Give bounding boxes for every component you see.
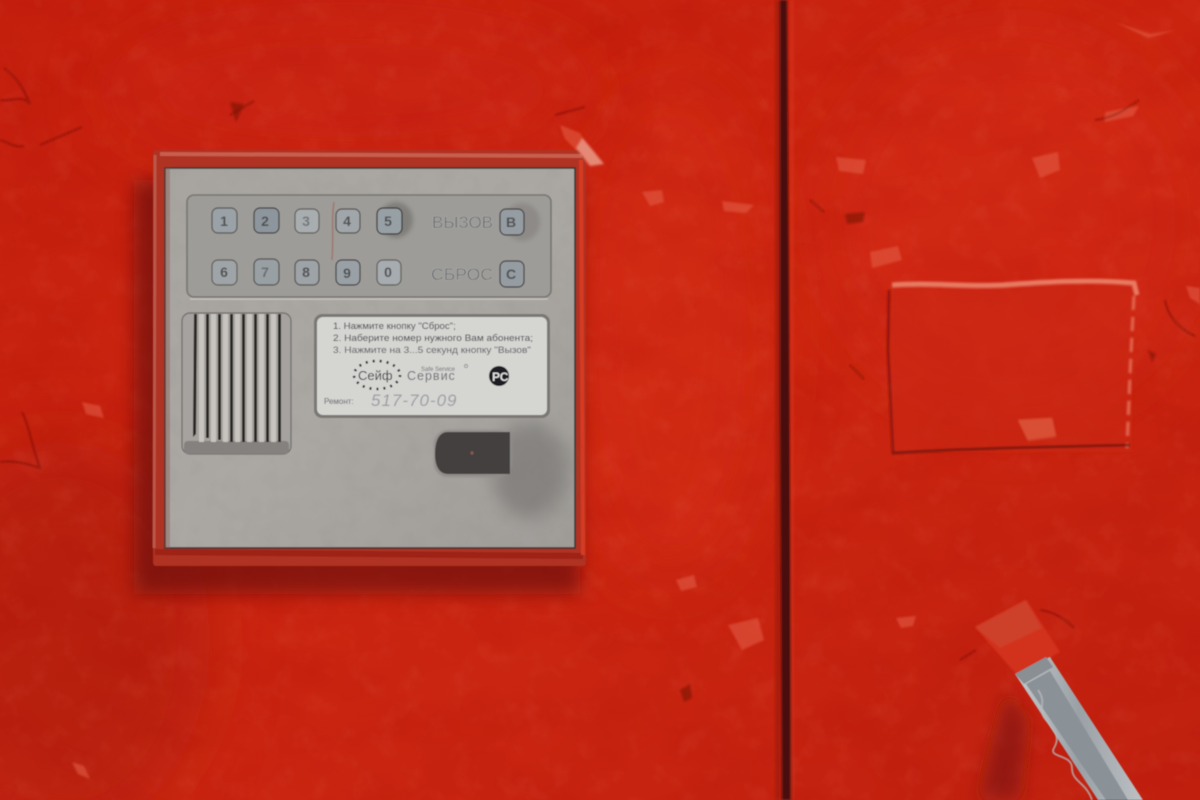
- sticker instructions text: [333, 321, 533, 356]
- sticker instructions text: 1. Нажмите кнопку "Сброс";: [333, 321, 456, 332]
- key row one: 2: [261, 213, 269, 229]
- repair phone line: Ремонт:: [324, 397, 354, 406]
- panel: red painted metal frame: [153, 138, 604, 566]
- repair phone line: 517-70-09: [371, 391, 458, 410]
- keypad buttons: [212, 208, 524, 287]
- key row one: 1: [220, 213, 228, 229]
- door handle: red mount and ornate metal strip: [975, 600, 1143, 800]
- logo: certification mark: РС: [492, 370, 509, 384]
- keypad recess: [187, 195, 551, 299]
- panel: grey metal faceplate: [165, 168, 575, 548]
- key row one: 4: [343, 213, 351, 229]
- intercom unit: [153, 138, 604, 566]
- instruction sticker: [314, 314, 550, 418]
- key row one: В: [506, 214, 516, 230]
- logo: Safe Service stars: Сейф: [358, 368, 393, 383]
- embossed rectangular patch on door: [888, 281, 1137, 453]
- key row two: С: [506, 266, 516, 282]
- reader slot: [434, 430, 512, 477]
- intercom shadow on door: [134, 180, 580, 594]
- keypad label: call: ВЫЗОВ: [432, 214, 493, 232]
- key row one: [212, 208, 524, 235]
- key row two: [212, 259, 524, 287]
- logo: certification mark: [489, 366, 509, 386]
- sticker instructions text: 3. Нажмите на 3...5 секунд кнопку "Вызов": [333, 345, 531, 356]
- key row two: 7: [261, 264, 269, 280]
- key row two: 9: [343, 265, 351, 281]
- handle mount plate: [975, 600, 1060, 676]
- logo: Safe Service stars: Safe Service: [421, 367, 456, 373]
- handle metal strip: [1015, 657, 1143, 800]
- key row one: 5: [384, 213, 392, 229]
- keypad label: reset: СБРОС: [431, 266, 493, 284]
- handle shadow: [980, 690, 1028, 800]
- door seam: vertical gap between door leaves: [775, 0, 794, 800]
- key row one: 3: [302, 213, 310, 229]
- logo: Safe Service stars: [354, 361, 468, 389]
- logo: Safe Service stars: Сервис: [407, 369, 456, 383]
- speaker grille: [182, 313, 291, 454]
- key row two: 6: [220, 264, 228, 280]
- repair phone line: [324, 391, 458, 410]
- sticker instructions text: 2. Наберите номер нужного Вам абонента;: [333, 333, 533, 344]
- key row two: 8: [302, 264, 310, 280]
- key row two: 0: [384, 264, 392, 280]
